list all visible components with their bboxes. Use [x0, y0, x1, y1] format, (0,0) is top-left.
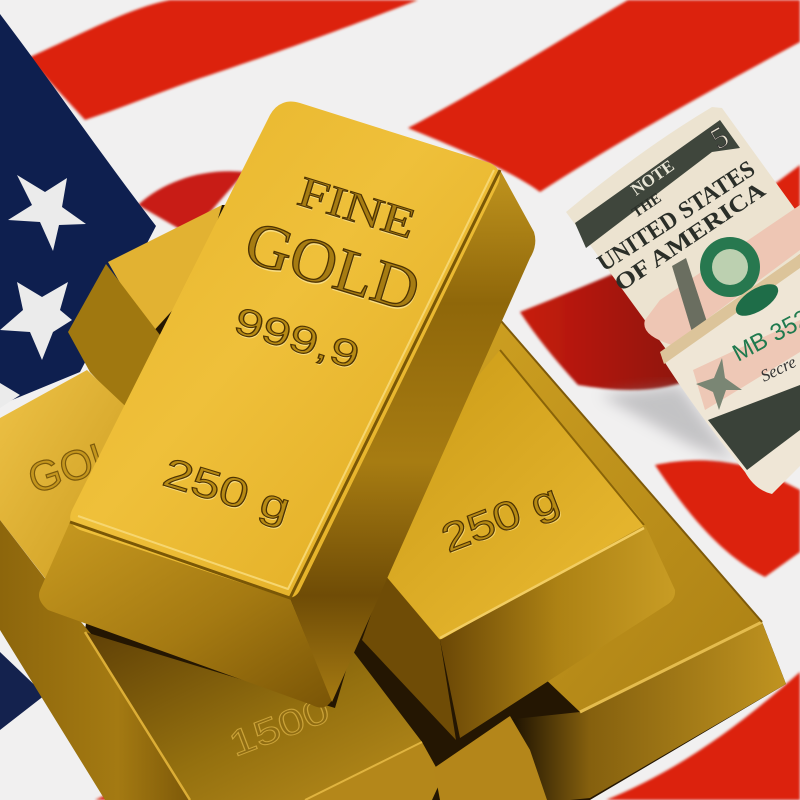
flag canton corner	[0, 652, 45, 730]
bill lettering: OF AMERICA: OF AMERICA	[610, 177, 770, 296]
gold bar: left	[0, 370, 196, 800]
flag canton	[0, 14, 156, 405]
pink engraving	[644, 205, 800, 345]
bill lettering: THE: THE	[629, 190, 665, 221]
engraved text: 999,9	[229, 300, 365, 379]
dark shadow mass under the gold bars	[85, 200, 786, 800]
bill numeral: 5	[705, 120, 734, 156]
bill lettering: UNITED STATES: UNITED STATES	[593, 156, 760, 277]
top dark banknote band	[575, 120, 740, 248]
gold bar: back left	[68, 205, 222, 410]
engraved text: 250 g: 250 g	[436, 477, 565, 561]
treasury seal	[700, 237, 760, 297]
engraved text: 999,9: 999,9	[229, 300, 364, 378]
gold bar: large right	[420, 314, 786, 800]
engraved text: 999,9: 999,9	[230, 302, 365, 379]
engraved text: left bar: GOL	[22, 430, 121, 503]
bill lettering: NOTE: NOTE	[627, 156, 678, 199]
engraved text: 250g: 250 g	[159, 451, 296, 533]
engraved text: GOLD: GOLD	[238, 211, 428, 328]
main bar front face	[39, 522, 332, 708]
engraved text: FINE: FINE	[293, 170, 421, 250]
flag shading	[600, 385, 735, 462]
bill star	[696, 358, 742, 410]
main bar right side	[290, 170, 535, 702]
second seal	[731, 278, 783, 322]
gold bar: bottom 1500	[85, 632, 442, 800]
engraved text: 250g: 250 g	[158, 449, 296, 531]
flag stars	[0, 175, 86, 408]
signature: Secre	[757, 352, 800, 386]
engraved text: FINE: FINE	[292, 168, 421, 248]
upper roll	[566, 107, 800, 352]
lower roll	[660, 254, 800, 494]
bottom dark band	[708, 385, 800, 470]
engraved text: 250 g: 250 g	[437, 478, 567, 562]
engraved text: 1500: 1500	[223, 689, 335, 764]
gold bar: bottom centre	[434, 716, 547, 800]
pink swath	[693, 320, 800, 410]
rolled dollar bills	[566, 107, 800, 494]
gold bar: main bar	[39, 102, 535, 708]
main bar top face	[70, 102, 500, 598]
engraved text: GOLD: GOLD	[237, 208, 427, 325]
building engraving	[672, 258, 708, 332]
gold bar: second 250g	[340, 350, 675, 740]
